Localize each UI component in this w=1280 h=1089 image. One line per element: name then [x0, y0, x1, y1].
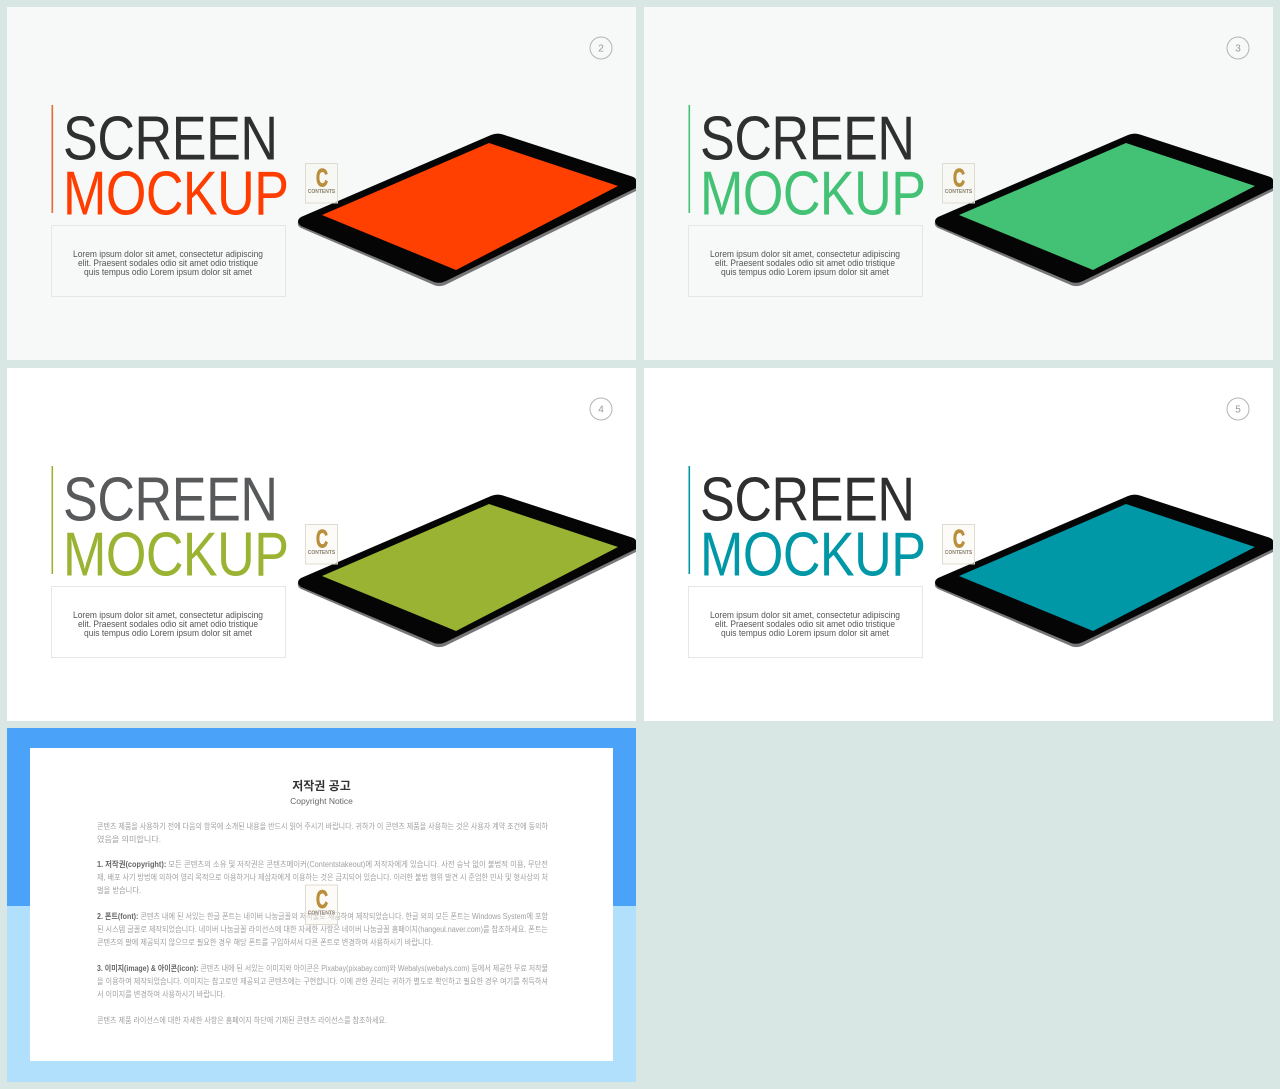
page number badge: 4 [598, 404, 604, 416]
title: MOCKUP [63, 159, 289, 229]
icon: watermark [306, 524, 338, 564]
panel: copyright notice [7, 728, 636, 1082]
icon: watermark: CONTENTS [945, 189, 973, 195]
text: copyright: 재, 배포 사기 방법에 의하여 영리 목적으로 이용하거나 제삼자에게 이용하는 것은 금지되어 있습니다. 이러한 불법 행위 발견 시 준엄한 민사 및 형사상의 처 [97, 872, 548, 882]
icon: watermark [942, 164, 974, 203]
title: SCREEN [63, 465, 278, 535]
text box: quis tempus odio Lorem ipsum dolor sit amet [721, 627, 889, 638]
text box: Lorem ipsum dolor sit amet, consectetur adipiscing [73, 609, 263, 620]
text: introduction [97, 821, 548, 844]
text: font: 콘텐츠의 팔에 제공되지 않으므로 필요한 경우 해당 폰트를 구입하셔서 다른 폰트로 변경하여 사용하시기 바랍니다. [97, 937, 433, 947]
accent bar [688, 466, 690, 574]
text: introduction: 콘텐츠 제품을 사용하기 전에 다음의 항목에 소개된 내용을 반드시 읽어 주시기 바랍니다. 귀하가 이 콘텐츠 제품을 사용하는 것은 사용자 계약 조건에 동의하 [97, 821, 548, 831]
icon: watermark: CONTENTS [308, 550, 336, 556]
title [63, 465, 289, 590]
text: image and icon: 서 이미지를 변경하여 사용하시기 바랍니다. [97, 989, 225, 999]
icon: watermark: C [316, 526, 328, 554]
panel: teal slide [644, 368, 1273, 721]
text: font: 된 시스템 글꼴로 제작되었습니다. 네이버 나눔글꼴 라이선스에 대한 자세한 사항은 네이버 나눔글꼴 홈페이지(hangeul.naver.com)를 참조하세요. 폰트는 [97, 924, 548, 934]
text box: quis tempus odio Lorem ipsum dolor sit amet [84, 266, 252, 277]
title [63, 104, 289, 229]
heading: Copyright Notice [290, 796, 353, 806]
page number badge [590, 398, 612, 420]
text box: elit. Praesent sodales odio sit amet odio tristique [715, 618, 895, 629]
icon: tablet mockup [298, 134, 636, 286]
icon: watermark [306, 885, 338, 924]
heading: 저작권 공고 [292, 778, 351, 793]
accent bar [52, 105, 53, 213]
icon: watermark: CONTENTS [308, 910, 336, 916]
text: copyright: 벌을 받습니다. [97, 885, 141, 895]
icon: watermark: CONTENTS [945, 550, 973, 556]
panel: green slide [644, 7, 1273, 360]
icon: watermark: C [316, 886, 328, 914]
title: MOCKUP [700, 520, 926, 590]
text: introduction: 였음을 의미합니다. [97, 834, 161, 844]
heading [290, 778, 353, 806]
text box [688, 586, 922, 658]
title: SCREEN [700, 104, 915, 174]
text box: quis tempus odio Lorem ipsum dolor sit amet [721, 266, 889, 277]
text: font [97, 911, 548, 947]
text box [52, 226, 286, 296]
page number badge [1227, 37, 1249, 59]
icon: watermark: CONTENTS [308, 189, 336, 195]
accent bar [52, 466, 53, 574]
icon: tablet mockup [935, 134, 1273, 286]
title: SCREEN [63, 104, 278, 174]
page number badge: 3 [1235, 44, 1241, 54]
title: SCREEN [700, 465, 915, 535]
text: copyright [97, 859, 548, 895]
icon: watermark [306, 164, 338, 203]
text box [688, 226, 922, 296]
icon: tablet mockup [935, 495, 1273, 647]
title: MOCKUP [63, 520, 289, 590]
text box: elit. Praesent sodales odio sit amet odio tristique [78, 618, 258, 629]
text: image and icon [97, 963, 548, 999]
text: image and icon: 3. 이미지(image) & 아이콘(icon): 콘텐츠 내에 된 서있는 이미지와 아이콘은 Pixabay(pixabay.com)와 Webalys(webalys.com) 등에서 제공한 무료 저작물 [97, 963, 548, 973]
text: license note: 콘텐츠 제품 라이선스에 대한 자세한 사항은 홈페이지 하단에 기재된 콘텐츠 라이선스를 참조하세요. [97, 1015, 387, 1025]
page number badge [1227, 398, 1249, 420]
text box: elit. Praesent sodales odio sit amet odio tristique [715, 257, 895, 268]
text box: Lorem ipsum dolor sit amet, consectetur adipiscing [710, 609, 900, 620]
icon: watermark: C [316, 164, 328, 192]
title [700, 465, 926, 590]
text: font: 2. 폰트(font): 콘텐츠 내에 된 서있는 한글 폰트는 네이버 나눔글꼴의 저작물로 제공하여 제작되었습니다. 한글 외의 모든 폰트는 Windows System에 포함 [97, 911, 548, 921]
icon: watermark [942, 524, 974, 564]
accent bar [688, 105, 690, 213]
icon: watermark: C [953, 526, 965, 554]
page number badge: 5 [1235, 404, 1241, 416]
text box: Lorem ipsum dolor sit amet, consectetur adipiscing [710, 248, 900, 259]
panel: olive slide [7, 368, 636, 721]
icon: watermark: C [953, 164, 965, 192]
page number badge: 2 [598, 44, 604, 54]
text box: elit. Praesent sodales odio sit amet odio tristique [78, 257, 258, 268]
title: MOCKUP [700, 159, 926, 229]
title [700, 104, 926, 229]
text: image and icon: 을 이용하여 제작되었습니다. 이미지는 참고로만 제공되고 콘텐츠에는 구현합니다. 이에 관한 권리는 귀하가 별도로 확인하고 필요한 경우 여기를 취득하셔 [97, 976, 548, 986]
text box: Lorem ipsum dolor sit amet, consectetur adipiscing [73, 248, 263, 259]
text box [52, 586, 286, 658]
page number badge [590, 37, 612, 59]
text: copyright: 1. 저작권(copyright): 모든 콘텐츠의 소유 및 저작권은 콘텐츠메이커(Contentstakeout)에 저작자에게 있습니다. 사전 승낙 없이 불법적 이용, 무단전 [97, 859, 548, 869]
icon: tablet mockup [298, 495, 636, 647]
text box: quis tempus odio Lorem ipsum dolor sit amet [84, 627, 252, 638]
panel: orange slide [7, 7, 636, 360]
